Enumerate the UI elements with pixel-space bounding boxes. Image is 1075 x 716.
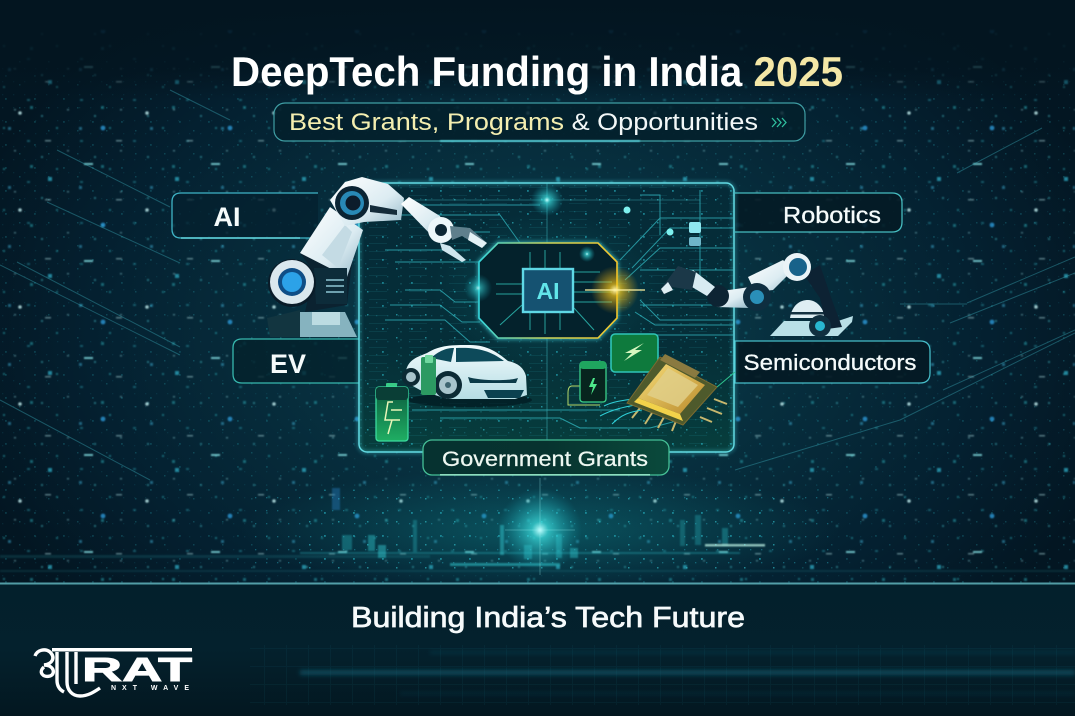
icon: chevrons xyxy=(772,118,786,127)
label: AI xyxy=(172,193,318,238)
label: AI: AI xyxy=(214,202,240,232)
icon: electric car xyxy=(402,345,532,407)
light flare: gold xyxy=(585,266,645,314)
subtitle pill: Best Grants, Programs & Opportunities xyxy=(289,109,758,136)
light flare: cyan xyxy=(464,184,674,302)
AI chip: AI xyxy=(536,278,560,304)
lower band xyxy=(0,584,1075,716)
label: Semiconductors: Semiconductors xyxy=(744,350,916,375)
icon: green energy screen xyxy=(611,334,658,372)
AI chip xyxy=(433,210,663,370)
central panel xyxy=(359,183,734,452)
icon: side indicator xyxy=(689,222,701,246)
icon: green battery xyxy=(376,383,408,441)
logo xyxy=(35,648,192,696)
label: Government Grants: Government Grants xyxy=(442,448,648,471)
chip square xyxy=(523,269,573,312)
robot arm: right xyxy=(660,253,853,337)
logo overbar xyxy=(52,648,192,652)
label: EV: EV xyxy=(270,349,306,379)
diagonal light lines xyxy=(0,90,1075,480)
label: EV xyxy=(233,339,360,383)
icon: semiconductor chip xyxy=(600,354,735,431)
subtitle pill xyxy=(274,103,805,142)
logo tagline: NXT WAVE xyxy=(111,685,192,692)
circuit traces xyxy=(385,183,733,440)
label: Semiconductors xyxy=(735,341,930,383)
title: DeepTech Funding in India 2025 xyxy=(231,48,843,95)
panel border xyxy=(359,183,734,452)
skyline xyxy=(0,488,1075,572)
logo mark xyxy=(35,650,100,696)
label: Robotics xyxy=(735,193,902,232)
icon: charging station xyxy=(568,361,606,405)
label: Robotics: Robotics xyxy=(783,202,881,228)
tagline: Building India’s Tech Future xyxy=(351,602,745,634)
logo wordmark: RAT xyxy=(82,651,192,688)
robot arm: left xyxy=(267,177,487,337)
label: Government Grants xyxy=(423,440,669,476)
